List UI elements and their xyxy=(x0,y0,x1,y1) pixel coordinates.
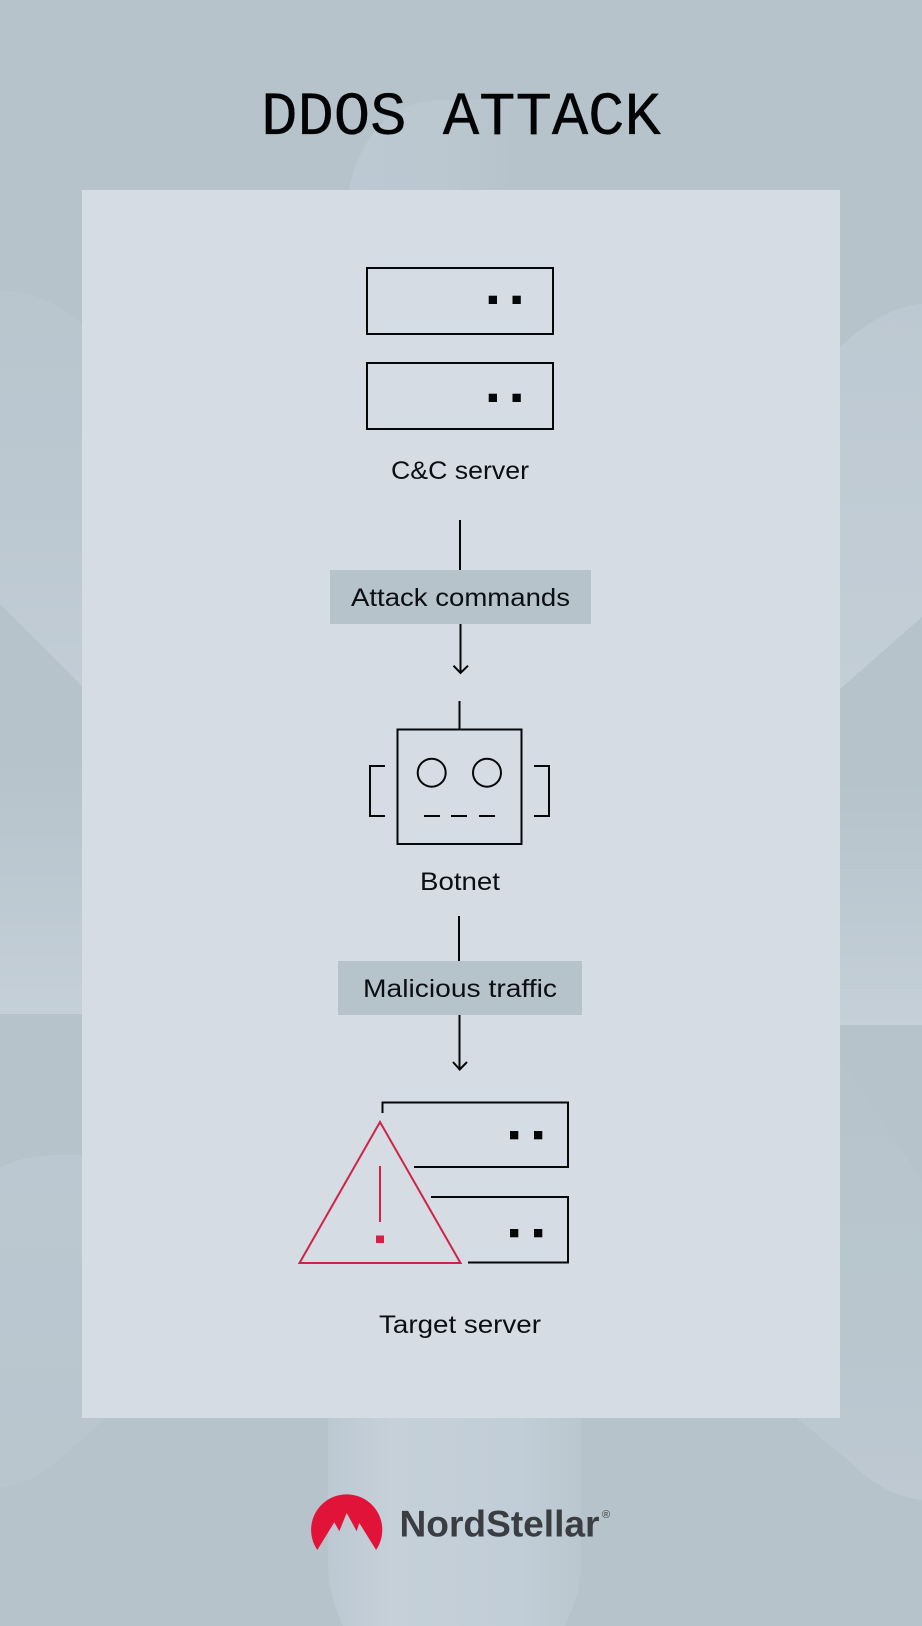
connector line xyxy=(458,916,460,961)
icon: warning triangle xyxy=(300,1122,460,1263)
label: C&C server: C&C server xyxy=(391,457,529,485)
icon: robot xyxy=(370,701,549,844)
logo: NordStellar: NordStellar xyxy=(400,1504,600,1545)
step label: malicious traffic xyxy=(338,961,582,1015)
icon: target server xyxy=(300,1102,568,1263)
step label: attack commands: Attack commands xyxy=(351,584,570,612)
icon: red mountain xyxy=(311,1494,382,1550)
label: Botnet: Botnet xyxy=(420,868,500,896)
icon: C&C server xyxy=(367,268,553,429)
arrow to botnet xyxy=(454,624,468,673)
step label: malicious traffic: Malicious traffic xyxy=(363,975,557,1003)
connector line xyxy=(459,520,461,570)
label: Target server: Target server xyxy=(379,1311,541,1339)
step label: attack commands xyxy=(330,570,591,624)
title: DDOS ATTACK xyxy=(261,84,661,153)
logo: NordStellar: ® xyxy=(602,1509,610,1521)
panel: diagram xyxy=(82,190,840,1418)
logo: NordStellar xyxy=(311,1494,610,1550)
arrow to target xyxy=(453,1015,467,1070)
